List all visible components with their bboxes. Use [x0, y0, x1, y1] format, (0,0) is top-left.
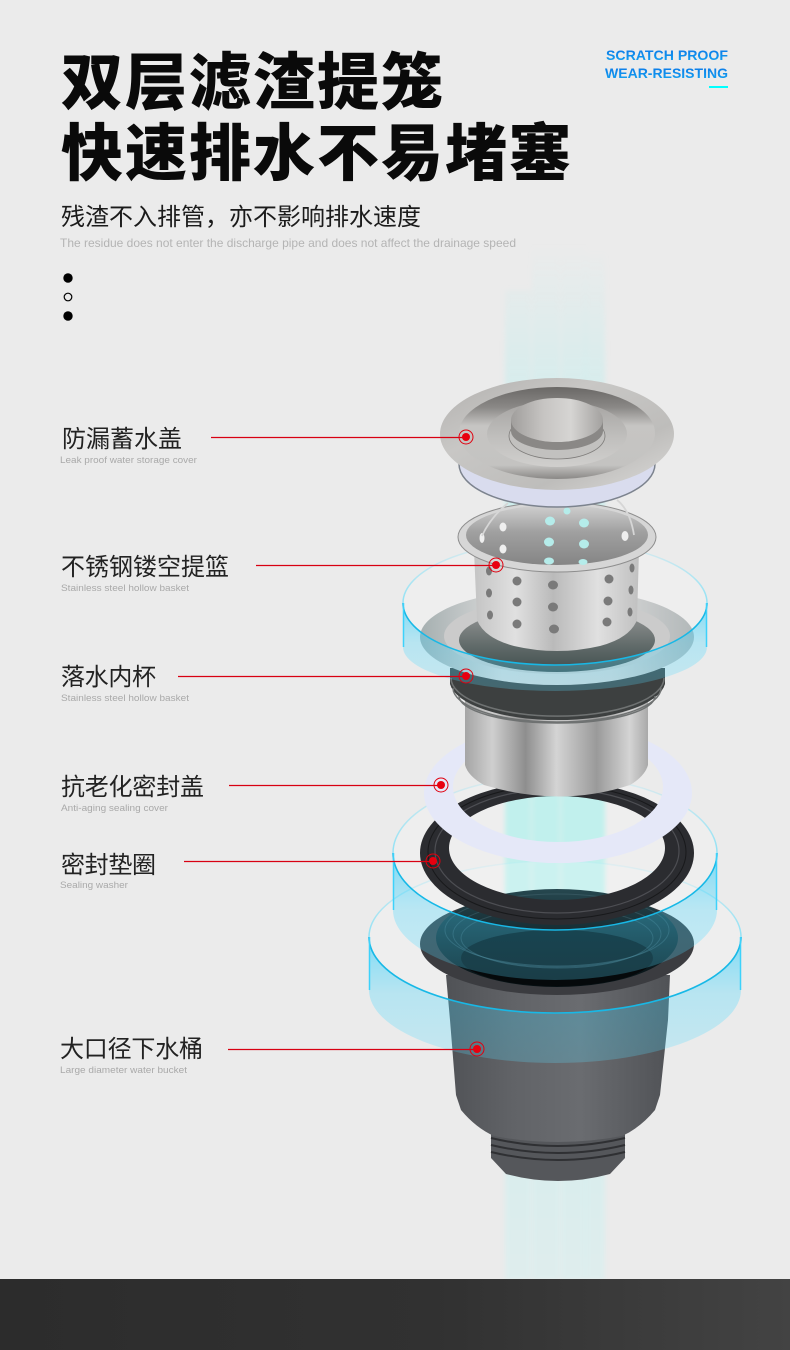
title [61, 49, 571, 189]
cover knob [509, 398, 605, 459]
basket inner holes [480, 508, 628, 565]
tagline [605, 47, 728, 81]
label: bucket: Large diameter water bucket [60, 1065, 187, 1076]
basket body [474, 550, 639, 651]
label: basket [61, 554, 229, 594]
cup inside [459, 608, 655, 672]
footer band [0, 1279, 790, 1350]
cup flange [420, 589, 694, 685]
sealing washer [420, 781, 694, 925]
leak proof water storage cover [440, 378, 674, 507]
pagination dots [63, 273, 73, 321]
basket inside [466, 505, 648, 565]
label: sealing cover [61, 774, 204, 814]
subtitle: 残渣不入排管，亦不影响排水速度 [61, 204, 421, 231]
label: bucket [60, 1036, 203, 1076]
label: inner cup [61, 664, 189, 704]
cyan ring fronts [369, 853, 741, 1063]
cyan ring backs [369, 541, 741, 1013]
label: inner cup: 落水内杯 [61, 664, 156, 691]
callout lines and markers [178, 430, 503, 1056]
basket handle [482, 500, 634, 536]
anti-aging sealing cover [424, 723, 692, 863]
bucket thread [491, 1128, 625, 1181]
cover recess [459, 387, 655, 479]
tagline accent bar [709, 86, 728, 88]
cover plate [440, 378, 674, 490]
title: 快速排水不易堵塞 [61, 120, 571, 189]
cup thread [450, 668, 665, 723]
label: washer: Sealing washer [60, 880, 128, 891]
basket rim [458, 502, 656, 572]
label: basket: 不锈钢镂空提篮 [61, 554, 229, 581]
bucket body [446, 975, 670, 1142]
stainless steel hollow basket [458, 500, 656, 651]
bucket flange [420, 893, 694, 995]
basket outer holes [486, 564, 634, 634]
front cyan ring [403, 603, 707, 691]
label: washer: 密封垫圈 [61, 852, 156, 879]
cup body [465, 695, 648, 796]
label: washer [60, 852, 156, 891]
drain inner cup [420, 589, 694, 796]
bucket opening [436, 889, 678, 987]
label: sealing cover: Anti-aging sealing cover [61, 803, 168, 814]
water stream [505, 240, 605, 1280]
label: basket: Stainless steel hollow basket [61, 583, 189, 594]
label: cover [60, 426, 197, 466]
label: bucket: 大口径下水桶 [60, 1036, 203, 1063]
label: cover: Leak proof water storage cover [60, 455, 197, 466]
subtitle english: The residue does not enter the discharge pipe and does not affect the drainage speed [60, 236, 516, 250]
large diameter water bucket [420, 889, 694, 1181]
cover seal [459, 421, 655, 507]
label: sealing cover: 抗老化密封盖 [61, 774, 204, 801]
label: cover: 防漏蓄水盖 [62, 426, 182, 453]
tagline: SCRATCH PROOF [606, 47, 728, 63]
label: inner cup: Stainless steel hollow basket [61, 693, 189, 704]
tagline: WEAR-RESISTING [605, 65, 728, 81]
title: 双层滤渣提笼 [61, 49, 443, 118]
